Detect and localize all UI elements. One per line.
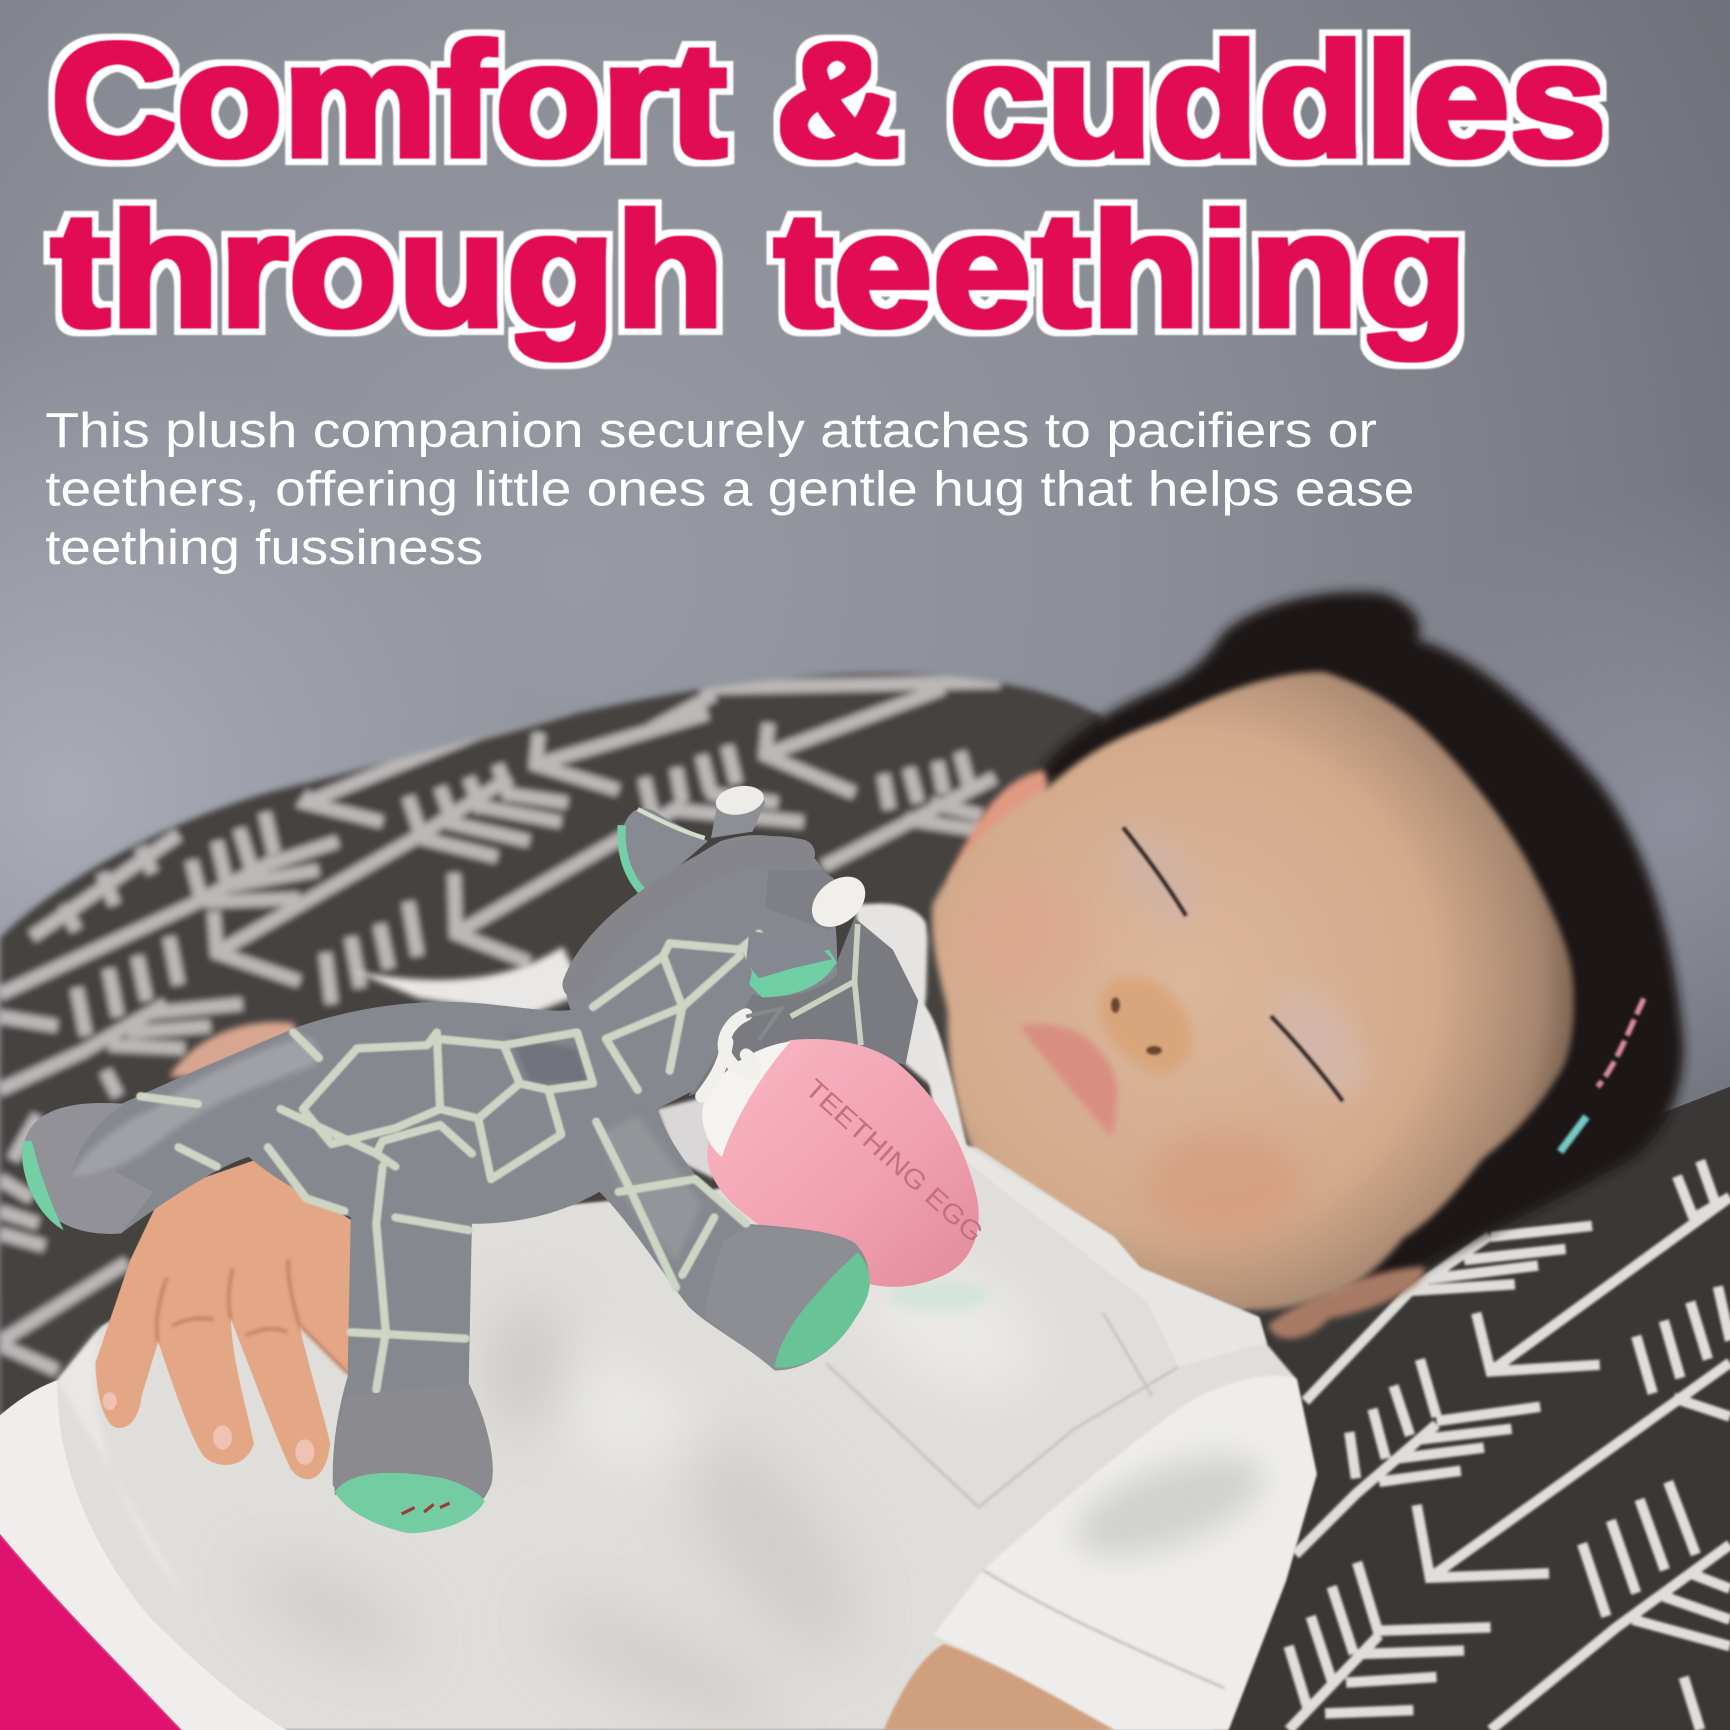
cloth behind giraffe head [855,904,963,1154]
second ear [1269,1267,1425,1339]
teething egg [702,1039,989,1287]
giraffe mane [577,851,800,985]
skirt [0,1534,182,1730]
shirt shading [237,1227,1062,1730]
giraffe ear [621,808,708,893]
giraffe, hand and egg in close-up coordinates [22,782,989,1533]
egg body [707,1039,979,1287]
cheek blush [960,877,1092,999]
pillow: blurred upper left [0,662,1103,1456]
eyes closed [1123,827,1186,916]
far side of giraffe head [689,918,918,1096]
eyelids [1097,808,1220,946]
green tint on shirt [888,1281,987,1312]
lower arm [884,1644,1114,1730]
giraffe front foot [334,1383,493,1508]
giraffe pattern lines [140,934,759,1390]
giraffe tone patches [70,1036,701,1262]
photo: sleeping baby with plush giraffe and teething egg [0,592,1730,1730]
shirt [0,906,1316,1730]
giraffe rear foot [705,1227,869,1370]
description text: teething fussiness [45,521,483,575]
giraffe horn [711,782,766,838]
face [932,672,1574,1310]
giraffe snout [749,950,837,997]
description text [45,404,1414,575]
hand [96,1160,357,1479]
egg rope [701,1008,781,1096]
title line 1: Comfort & cuddles [51,11,1606,191]
egg label: TEETHING EGG [800,1073,989,1248]
giraffe right horn [765,870,855,930]
title line 2: through teething [51,180,1467,360]
description text: teethers, offering little ones a gentle hug that helps ease [45,462,1414,516]
hair clip [1560,999,1644,1152]
giraffe back foot [22,1103,153,1234]
plush giraffe [22,782,875,1533]
sleeve [933,1376,1316,1730]
nose [1100,977,1192,1074]
title [51,11,1606,360]
description text: This plush companion securely attaches to pacifiers or [45,404,1377,458]
hair [1037,592,1684,1302]
shirt hem [0,1380,287,1730]
baby ear [949,770,1048,916]
upper arm behind giraffe [169,1022,300,1077]
giraffe silhouette [22,835,869,1533]
egg white cap [702,1041,791,1157]
pillow: sharp lower right [1214,1087,1730,1730]
lips [1019,1024,1118,1138]
collar [916,999,1267,1367]
shirt seam lines [826,1313,1225,1688]
